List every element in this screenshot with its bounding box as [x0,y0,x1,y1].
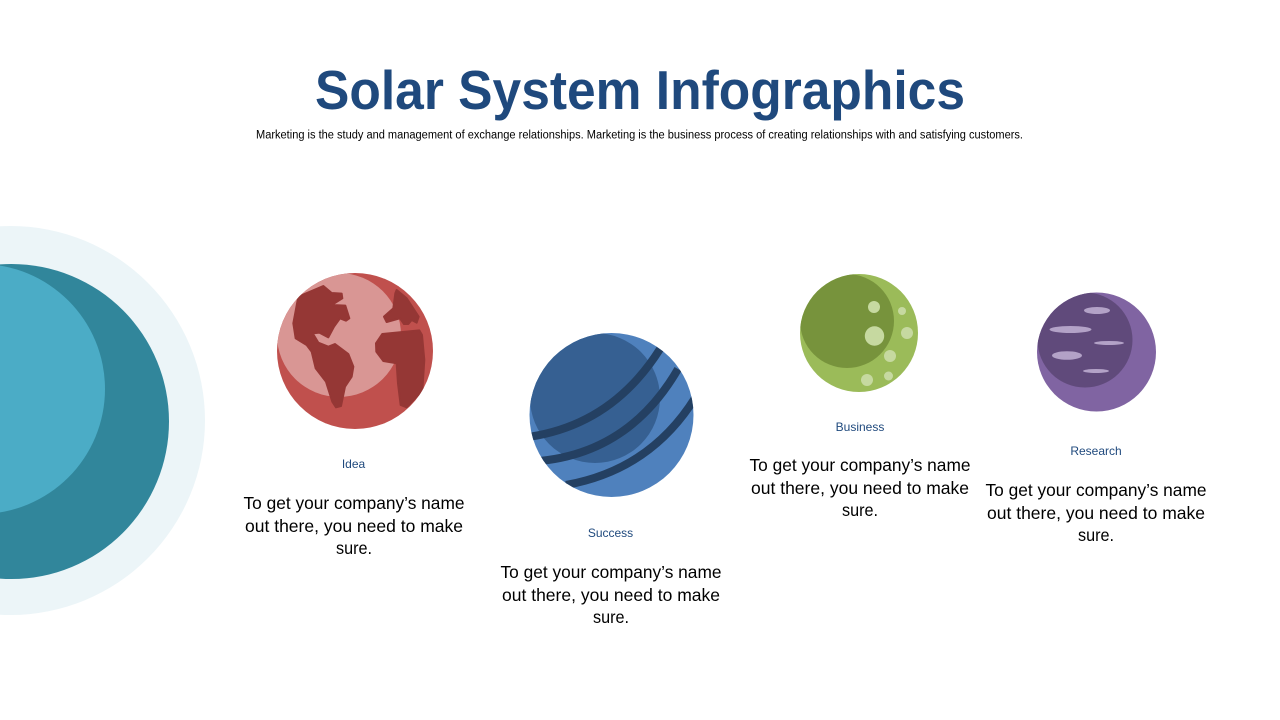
text block: Business: out there, you need to make [751,478,969,498]
text block: Idea [244,493,464,558]
text block: Business: To get your company’s name [750,455,970,475]
title: Solar System Infographics [315,60,965,121]
text block: Idea: sure. [336,538,372,558]
panel: Business [750,274,970,520]
panel: Success [500,333,722,627]
text block: Research: To get your company’s name [986,480,1206,500]
label: Success: Success [588,526,633,540]
icon: green cratered planet [800,274,918,392]
text block: Business [750,455,970,520]
text block: Idea: To get your company’s name [244,493,464,513]
text block: Success: To get your company’s name [500,562,722,582]
text block: Success: sure. [593,607,629,627]
icon: blue ringed planet [528,333,695,497]
icon: purple gas planet [1037,292,1156,412]
text block: Success [500,562,722,627]
text block: Business: sure. [842,500,878,520]
subtitle: Marketing is the study and management of exchange relationships. Marketing is the business process of creating relationships with and satisfying customers. [256,130,1023,142]
panel: Idea [244,273,464,558]
text block: Research: sure. [1078,525,1114,545]
label: Business: Business [836,420,884,434]
sun: concentric circles at left edge [0,226,205,615]
label: Idea: Idea [342,457,366,471]
text block: Idea: out there, you need to make [245,516,463,536]
icon: red earth planet [277,273,433,429]
label: Research: Research [1070,444,1122,458]
infographic canvas [0,70,1206,623]
panel: Research [986,292,1206,545]
text block: Success: out there, you need to make [502,585,720,605]
text block: Research [986,480,1206,545]
text block: Research: out there, you need to make [987,503,1205,523]
